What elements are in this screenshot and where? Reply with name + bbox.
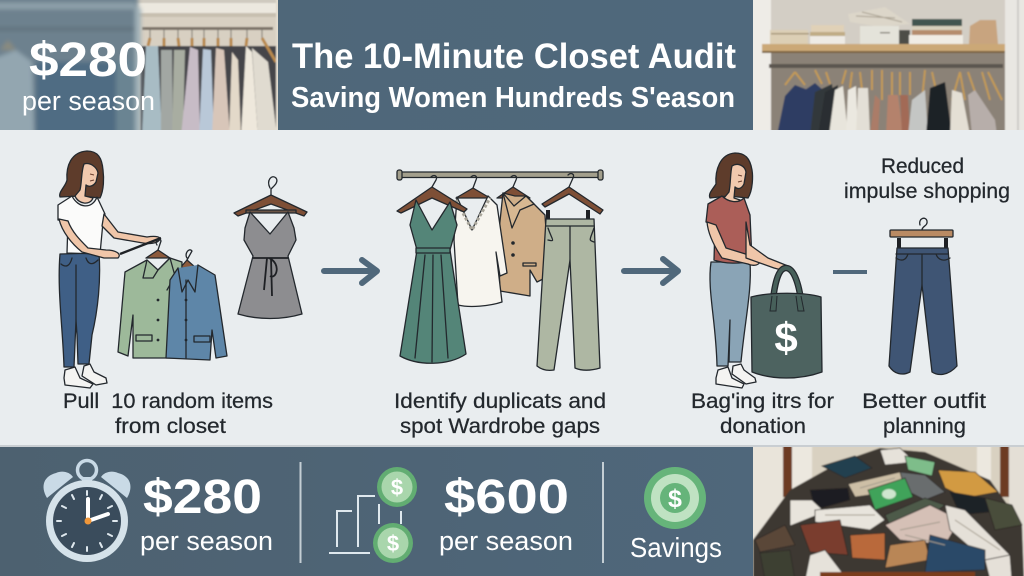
photo: closet with hanging clothes and savings overlay: [0, 0, 285, 140]
left translucent blue overlay: [0, 0, 141, 140]
label: better outfit planning: planning: [883, 415, 966, 438]
arrow 2: [624, 259, 678, 283]
step 4: reduced impulse shopping and better planning: [844, 155, 1010, 438]
illustration: green dress: [397, 176, 467, 363]
illustration: sage trousers on hanger: [537, 174, 603, 370]
stat: $280 per season: per season: [140, 526, 273, 556]
label: reduced impulse shopping: impulse shopping: [844, 180, 1010, 203]
label: better outfit planning: Better outfit: [862, 390, 986, 413]
illustration: donation tote bag with dollar sign: $: [774, 314, 798, 361]
label: pull 10 random items: Pull 10 random items: [63, 390, 273, 413]
label: identify duplicates and gaps: spot Wardrobe gaps: [400, 415, 600, 438]
illustration: green and blue jackets on hangers: [118, 239, 227, 360]
label: savings: Savings: [630, 532, 722, 563]
step 1: woman pulling items from closet: [58, 151, 307, 438]
label: reduced impulse shopping: [844, 155, 1010, 203]
stat: $280 per season: $280: [29, 34, 147, 87]
icon: alarm clock: [44, 460, 130, 562]
illustration: grey dress on hanger: [234, 177, 307, 318]
label: bagging items for donation: Bag'ing itrs for: [691, 390, 834, 413]
icon: bar chart with coins: $: [391, 475, 403, 500]
label: identify duplicates and gaps: Identify duplicats and: [394, 390, 606, 413]
stat: $600 per season: per season: [439, 526, 573, 556]
stat: $600 per season: $600: [444, 471, 569, 524]
label: bagging items for donation: [691, 390, 834, 438]
stat: $280 per season: $280: [143, 471, 262, 524]
illustration: woman in white t-shirt: [58, 151, 161, 388]
icon: savings coin: [644, 467, 706, 529]
stat: $280 per season: per season: [22, 86, 155, 116]
label: reduced impulse shopping: Reduced: [881, 155, 964, 178]
title: The 10-Minute Closet Audit: [292, 37, 736, 76]
label: better outfit planning: [862, 390, 986, 438]
subtitle: Saving Women Hundreds S'eason: [291, 82, 735, 114]
bottom stats band: [0, 445, 1024, 576]
illustration: woman in red t-shirt: [706, 153, 788, 388]
stat: $280 per season: [24, 40, 154, 116]
illustration: clothes rod: [397, 170, 603, 180]
label: bagging items for donation: donation: [720, 415, 806, 438]
icon: savings coin: $: [668, 485, 682, 513]
arrow 1: [324, 260, 377, 283]
illustration: white lace blouse: [454, 176, 507, 306]
illustration: tan blazer: [497, 176, 549, 296]
label: pull 10 random items: [63, 390, 273, 438]
illustration: jeans on wooden hanger: [889, 218, 957, 374]
icon: bar chart with coins: $: [387, 531, 399, 556]
icon: bar chart with coins: [329, 467, 417, 563]
stat: $280 per season: [140, 471, 273, 556]
photo: pile of clothes: [745, 440, 1024, 576]
stat: $600 per season: [439, 471, 573, 556]
label: identify duplicates and gaps: [394, 390, 606, 438]
step 3: woman bagging items: [691, 153, 834, 438]
photo: organized closet: [750, 0, 1024, 135]
title panel: [278, 0, 753, 130]
step 2: rail of clothes: [394, 170, 606, 438]
label: pull 10 random items: from closet: [115, 415, 226, 438]
illustration: donation tote bag with dollar sign: [751, 268, 822, 378]
connector dash: [833, 270, 867, 274]
